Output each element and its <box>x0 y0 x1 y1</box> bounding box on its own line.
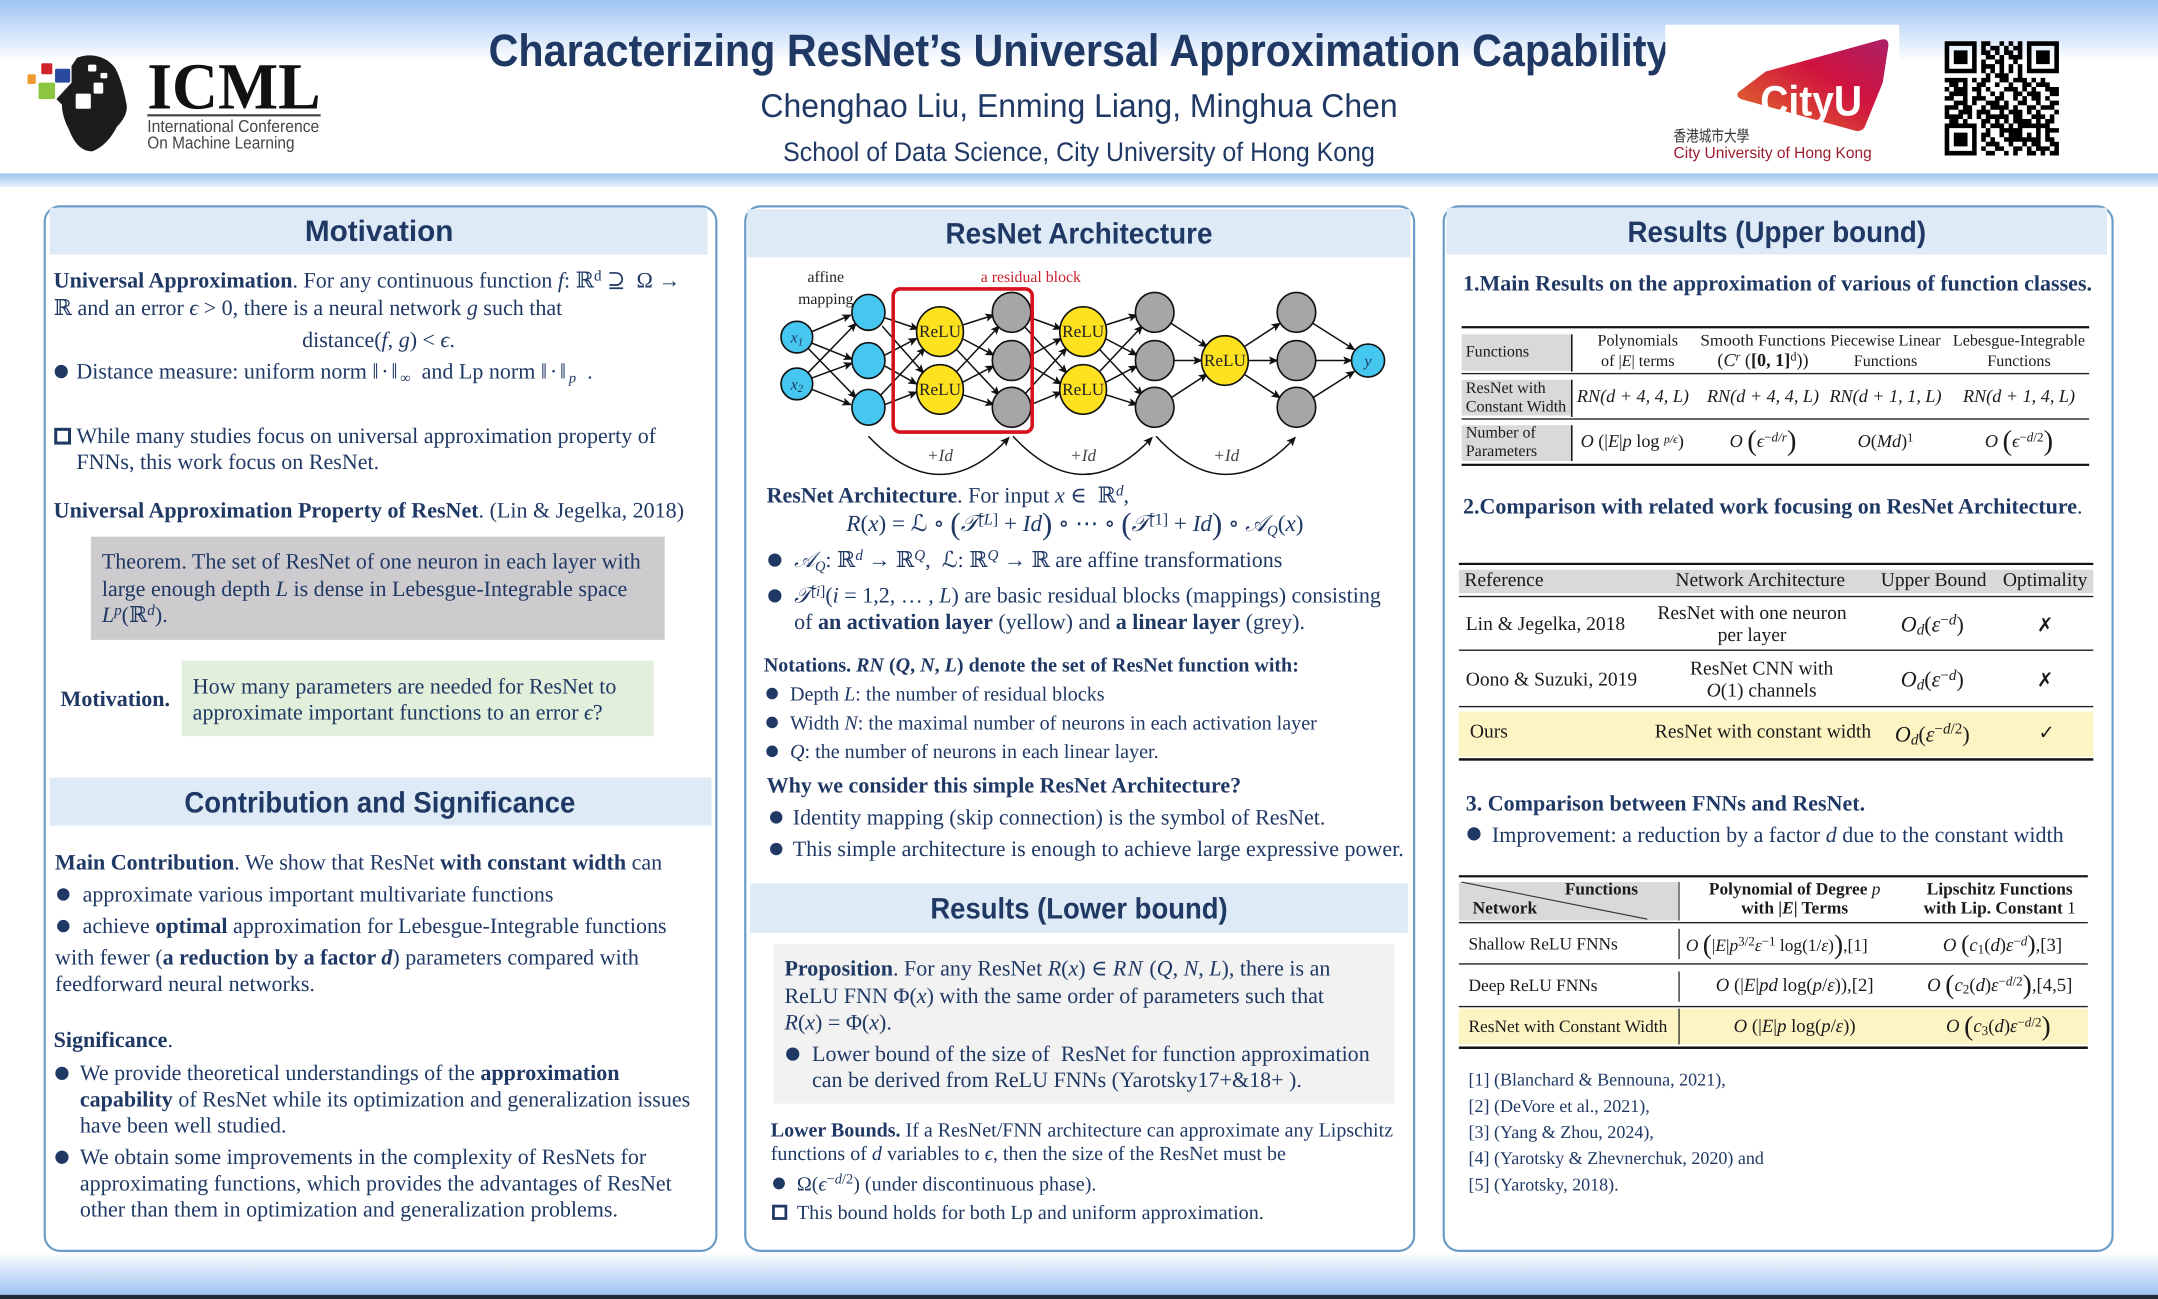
table: FNNs vs ResNet: E|p <box>1715 936 1738 955</box>
diagram: ResNet network: ReLU <box>919 380 961 399</box>
table: FNNs vs ResNet: −d <box>2013 936 2027 949</box>
text: ResNet architecture definition: R(x) = ℒ ∘ <box>846 511 945 537</box>
callout: theorem: Theorem. The set of ResNet of one neuron in each layer with <box>102 550 641 574</box>
table: related work: Ours <box>1470 721 1508 743</box>
callout: motivation question: How many parameters are needed for ResNet to <box>193 676 616 699</box>
table: related work: ) <box>1962 724 1970 747</box>
table: main results: ) <box>1678 431 1684 451</box>
text: lower bounds: −d/2 <box>827 1172 853 1188</box>
table: main results: O <box>1730 431 1747 451</box>
text: lower bounds: ) (under discontinuous phase). <box>853 1174 1096 1196</box>
table: main results: Functions <box>1854 352 1918 370</box>
callout: theorem: ). <box>155 604 168 627</box>
text: ResNet architecture definition: ( <box>825 585 833 608</box>
text: motivation label: Motivation. <box>61 688 170 711</box>
table: FNNs vs ResNet: ResNet with Constant Width <box>1468 1017 1668 1036</box>
table: main results: −d/2 <box>2019 432 2044 446</box>
table: FNNs vs ResNet: ) <box>1834 930 1843 960</box>
callout: theorem: p <box>113 603 122 619</box>
authors: Chenghao Liu, Enming Liang, Minghua Chen <box>760 88 1398 125</box>
table: FNNs vs ResNet: Polynomial of Degree p <box>1709 879 1880 899</box>
text: ResNet architecture definition: Id <box>1021 511 1043 537</box>
text: ResNet architecture definition: → ℝ are affine transformations <box>998 549 1282 572</box>
table: related work: ( <box>1924 669 1932 692</box>
table: FNNs vs ResNet: O <box>1946 1016 1964 1036</box>
table: FNNs vs ResNet: O <box>1686 936 1703 955</box>
text: significance: have been well studied. <box>80 1115 287 1138</box>
diagram: ResNet network: affine <box>807 270 844 286</box>
diagram: ResNet network: y <box>1363 354 1373 370</box>
table: main results: )) <box>1797 350 1809 370</box>
table: main results: ) <box>1787 424 1796 457</box>
table: related work <box>1459 563 2093 761</box>
text: universal approximation: and Lp norm <box>411 361 541 384</box>
table: main results: −d/r <box>1764 432 1787 446</box>
text: ResNet architecture definition: Q <box>815 560 826 575</box>
subheading: main results: 1.Main Results on the approximation of various of function classes. <box>1463 272 2092 296</box>
table: FNNs vs ResNet: with |E| Terms <box>1741 899 1848 918</box>
heading: Results (Upper bound) <box>1446 208 2107 255</box>
text: notations: Depth L: the number of residual blocks <box>790 684 1105 706</box>
table: related work: per layer <box>1718 625 1787 647</box>
logo: CityU <box>1665 25 1899 176</box>
text: references <box>1468 1069 1765 1194</box>
subheading: comparison with related work: 2.Comparison with related work focusing on ResNet Architecture. <box>1463 495 2083 519</box>
table: related work: ) <box>1956 614 1964 637</box>
text: significance: Significance. <box>54 1029 173 1053</box>
table: related work: Network Architecture <box>1675 570 1845 592</box>
heading: ResNet Architecture <box>747 209 1411 257</box>
table: FNNs vs ResNet: c <box>1969 934 1978 955</box>
logo: CityU: CityU <box>1760 77 1862 125</box>
text: references: [4] (Yarotsky & Zhevnerchuk, 2020) and <box>1468 1148 1765 1168</box>
table: related work: O(1) channels <box>1707 680 1817 702</box>
table: related work: ResNet CNN with <box>1690 658 1833 680</box>
table: FNNs vs ResNet: O <box>1927 974 1945 995</box>
table: main results: ( <box>1740 350 1751 370</box>
table: FNNs vs ResNet: ) <box>2023 970 2032 1000</box>
table: main results: r <box>1736 350 1741 363</box>
table: FNNs vs ResNet: ( <box>1969 974 1976 995</box>
table: related work: O <box>1901 614 1917 637</box>
text: ResNet architecture definition: [L] <box>978 509 998 528</box>
text: ResNet architecture definition: Q <box>1267 523 1278 539</box>
diagram: ResNet network: mapping <box>798 292 854 308</box>
text: main contribution: Main Contribution. We show that ResNet with constant width can <box>55 852 662 875</box>
text: universal approximation: distance(f, g) < ϵ. <box>302 329 455 352</box>
text: ResNet architecture definition: , <box>1124 484 1129 508</box>
table: related work: ✗ <box>2037 615 2053 637</box>
table: related work: Oono & Suzuki, 2019 <box>1466 669 1637 691</box>
table: FNNs vs ResNet: Lipschitz Functions <box>1927 879 2073 899</box>
text: focus on ResNet: While many studies focus on universal approximation property of <box>76 425 657 449</box>
text: significance <box>54 1029 690 1222</box>
text: why this architecture: Identity mapping (skip connection) is the symbol of ResNet. <box>793 806 1325 830</box>
table: main results: ResNet with <box>1466 379 1546 397</box>
text: main contribution: feedforward neural networks. <box>55 973 315 996</box>
table: main results: Piecewise Linear <box>1830 332 1941 350</box>
top gradient band <box>0 0 2158 62</box>
table: FNNs vs ResNet: ε <box>1755 936 1762 955</box>
table: main results: (C <box>1717 350 1736 370</box>
table: main results: Number of <box>1466 424 1536 442</box>
text: ResNet architecture definition: [1] <box>1149 509 1168 528</box>
callout: theorem: (ℝ <box>122 604 148 627</box>
text: ResNet architecture definition: ( <box>1278 511 1286 537</box>
table: main results: Functions <box>1987 352 2051 370</box>
text: notations <box>764 655 1317 764</box>
diagram: ResNet network: +Id <box>1213 446 1240 465</box>
text: universal approximation: . <box>576 361 593 384</box>
heading: Motivation <box>50 208 707 255</box>
logo: CityU: City University of Hong Kong <box>1674 146 1872 162</box>
table: FNNs vs ResNet: 3/2 <box>1738 936 1755 949</box>
table: related work: −d <box>1940 612 1956 629</box>
logo: ICML: International Conference <box>147 117 319 136</box>
callout: theorem: d <box>147 603 156 619</box>
text: lower bounds: This bound holds for both Lp and uniform approximation. <box>797 1203 1264 1225</box>
table: main results: O <box>1985 431 2002 451</box>
text: ResNet architecture definition: 𝒜 <box>794 549 822 572</box>
text: ResNet architecture definition: ( <box>950 506 961 541</box>
table: main results: RN(d + 4, 4, L) <box>1576 385 1689 406</box>
diagram: ResNet network: ReLU <box>919 322 961 341</box>
table: main results: ϵ <box>2012 431 2020 451</box>
table: related work: ε <box>1932 614 1941 637</box>
text: ResNet architecture definition: d <box>1116 483 1124 500</box>
callout: proposition: Proposition. For any ResNet R(x) ∈ RN (Q, N, L), there is an <box>784 958 1330 981</box>
text: universal approximation: ∞ <box>400 372 411 387</box>
text: references: [3] (Yang & Zhou, 2024), <box>1468 1121 1654 1142</box>
text: universal approximation: d <box>594 268 602 285</box>
subheading: FNNs vs ResNet <box>1466 793 2064 848</box>
table: related work: ε <box>1932 669 1941 692</box>
title: Characterizing ResNet’s Universal Approximation Capability <box>489 25 1670 76</box>
panel: left column <box>45 206 716 1251</box>
callout: proposition: R(x) = Φ(x). <box>783 1011 892 1035</box>
table: main results: RN(d + 1, 1, L) <box>1828 385 1942 406</box>
text: ResNet architecture definition: ∘ ⋯ ∘ <box>1052 511 1121 537</box>
header divider band <box>0 173 2158 187</box>
text: ResNet architecture definition: ) <box>1212 506 1222 541</box>
text: universal approximation property: Universal Approximation Property of ResNet. (Lin & Jegelka, 2018) <box>54 500 684 523</box>
heading: Results (Lower bound): Results (Lower bound) <box>930 892 1228 925</box>
table: main results: ( <box>1747 424 1757 457</box>
table: main results: Lebesgue-Integrable <box>1953 332 2085 350</box>
table: related work: ResNet with constant width <box>1655 721 1871 743</box>
text: universal approximation: Distance measure: uniform norm ‖·‖ <box>76 361 400 384</box>
footer: watermark text: www.PosterPresentations.com <box>77 1273 161 1280</box>
text: ResNet architecture definition: , <box>925 549 942 572</box>
diagram: ResNet network: x <box>791 377 798 394</box>
table: FNNs vs ResNet: ε) <box>1821 936 1834 955</box>
table: main results: Polynomials <box>1598 332 1679 350</box>
logo: CityU: 香港城市大學 <box>1674 128 1749 146</box>
table: main results: Constant Width <box>1466 398 1566 416</box>
table: main results: ( <box>2002 424 2012 457</box>
table: main results: RN(d + 1, 4, L) <box>1962 385 2075 406</box>
text: ResNet architecture definition: ( <box>1121 506 1132 541</box>
text: why this architecture: This simple architecture is enough to achieve large expressive power. <box>793 838 1404 861</box>
table: main results: Functions <box>1466 343 1530 361</box>
table: FNNs vs ResNet: O <box>1943 934 1961 955</box>
diagram: ResNet network: ReLU <box>1204 351 1246 370</box>
callout: motivation question <box>182 661 654 736</box>
text: ResNet architecture definition <box>767 483 1381 634</box>
table: FNNs vs ResNet: ,[3] <box>2036 934 2062 955</box>
text: ResNet architecture definition: + <box>1168 511 1193 537</box>
table: main results: ) <box>2044 424 2053 457</box>
table: FNNs vs ResNet: O (|E|pd log(p/ε)),[2] <box>1716 974 1874 995</box>
diagram: ResNet network: a residual block <box>981 270 1081 286</box>
callout: theorem: L <box>100 604 114 627</box>
text: why this architecture: Why we consider this simple ResNet Architecture? <box>767 775 1241 798</box>
text: ResNet architecture definition: ∘ <box>1222 511 1245 537</box>
text: focus on ResNet: FNNs, this work focus on ResNet. <box>76 451 379 475</box>
subheading: FNNs vs ResNet: 3. Comparison between FNNs and ResNet. <box>1466 793 1865 816</box>
text: ResNet architecture definition: d <box>855 548 864 564</box>
diagram: ResNet network: +Id <box>1070 446 1097 465</box>
table: main results: p/ϵ <box>1663 432 1679 446</box>
table: main results: d <box>1790 350 1797 363</box>
table: main results: ϵ <box>1757 431 1765 451</box>
table: main results <box>1462 326 2089 466</box>
text: notations: Width N: the maximal number of neurons in each activation layer <box>790 713 1317 735</box>
table: related work: ( <box>1918 724 1926 747</box>
text: ResNet architecture definition: 𝒜 <box>1245 511 1274 537</box>
text: ResNet architecture definition: x) <box>1286 511 1303 537</box>
table: FNNs vs ResNet: −d/2 <box>2017 1017 2042 1031</box>
text: ResNet architecture definition: + <box>998 511 1023 537</box>
table: main results: O (|E|p log <box>1581 431 1659 451</box>
text: significance: approximating functions, which provides the advantages of ResNet <box>80 1172 673 1196</box>
text: notations: Notations. RN (Q, N, L) denote the set of ResNet function with: <box>764 655 1299 677</box>
table: FNNs vs ResNet: −d/2 <box>1999 976 2023 989</box>
table: FNNs vs ResNet: 1 <box>1978 944 1985 958</box>
callout: motivation question: approximate important functions to an error ϵ? <box>193 702 603 725</box>
table: FNNs vs ResNet: d)ε <box>1994 1016 2017 1036</box>
heading: Results (Lower bound) <box>750 883 1408 933</box>
heading: Contribution and Significance: Contribution and Significance <box>184 786 575 819</box>
text: main contribution: achieve optimal approximation for Lebesgue-Integrable functions <box>83 915 667 938</box>
text: ResNet architecture definition: ) <box>1042 506 1052 541</box>
text: references: [1] (Blanchard & Bennouna, 2021), <box>1468 1069 1726 1090</box>
text: main contribution: approximate various important multivariate functions <box>83 883 553 907</box>
table: FNNs vs ResNet: d)ε <box>1976 974 1999 995</box>
logo: ICML: On Machine Learning <box>147 133 295 153</box>
table: related work: ( <box>1924 614 1932 637</box>
text: significance: We obtain some improvements in the complexity of ResNets for <box>80 1146 647 1170</box>
diagram: ResNet network: ReLU <box>1062 380 1104 399</box>
table: FNNs vs ResNet <box>1459 875 2088 1049</box>
table: related work: −d/2 <box>1934 721 1962 738</box>
text: universal approximation: p <box>567 372 576 387</box>
table: related work: Reference <box>1464 570 1543 592</box>
table: related work: ✓ <box>2038 722 2055 744</box>
callout: proposition: can be derived from ReLU FNNs (Yarotsky17+&18+ ). <box>812 1069 1302 1093</box>
table: FNNs vs ResNet: 2 <box>1963 984 1970 998</box>
text: why this architecture <box>767 775 1404 861</box>
table: FNNs vs ResNet: ,[4,5] <box>2032 974 2072 995</box>
footer: dark strip <box>0 1295 2158 1299</box>
callout: proposition <box>773 944 1394 1104</box>
logo: ICML: ICML <box>147 51 321 124</box>
text: universal approximation: Universal Approximation. For any continuous function f: ℝ <box>54 270 594 293</box>
text: lower bounds: functions of d variables to ϵ, then the size of the ResNet must be <box>771 1144 1286 1166</box>
table: FNNs vs ResNet: O (|E|p log(p/ε)) <box>1734 1016 1856 1036</box>
diagram: ResNet network: 1 <box>798 336 803 348</box>
table: FNNs vs ResNet: Functions <box>1565 879 1638 899</box>
text: ResNet architecture definition: i = 1,2, … , L) are basic residual blocks (mappings) consisting <box>833 585 1381 608</box>
text: lower bounds: Ω(ϵ <box>797 1174 827 1196</box>
callout: theorem <box>91 537 665 640</box>
panel: right column <box>1444 206 2113 1251</box>
table: related work: Lin & Jegelka, 2018 <box>1466 614 1625 636</box>
text: main contribution <box>55 852 667 996</box>
table: related work: O <box>1901 669 1917 692</box>
heading: ResNet Architecture: ResNet Architecture <box>946 217 1213 250</box>
table: main results: Parameters <box>1466 442 1538 460</box>
callout: proposition: ReLU FNN Φ(x) with the same order of parameters such that <box>784 985 1325 1009</box>
table: main results: [0, 1] <box>1751 350 1790 370</box>
table: FNNs vs ResNet: ) <box>2027 930 2036 958</box>
table: FNNs vs ResNet: d)ε <box>1990 934 2013 955</box>
logo: ICML <box>28 51 321 153</box>
table: FNNs vs ResNet: ( <box>1703 930 1712 960</box>
table: main results: 1 <box>1907 431 1913 444</box>
subheading: FNNs vs ResNet: Improvement: a reduction by a factor d due to the constant width <box>1492 824 2064 848</box>
heading: Results (Upper bound): Results (Upper bound) <box>1627 216 1926 249</box>
table: related work: d <box>1917 622 1925 638</box>
text: ResNet architecture definition: ResNet Architecture. For input x ∈ ℝ <box>767 484 1116 508</box>
table: FNNs vs ResNet: 3 <box>1982 1025 1989 1039</box>
table: related work: Upper Bound <box>1881 570 1987 592</box>
QR code <box>1945 44 2059 153</box>
table: FNNs vs ResNet: Deep ReLU FNNs <box>1468 976 1598 995</box>
table: FNNs vs ResNet: ( <box>1964 1011 1974 1042</box>
text: ResNet architecture definition: 𝒯 <box>1132 511 1156 537</box>
text: lower bounds: Lower Bounds. If a ResNet/FNN architecture can approximate any Lipschitz <box>771 1120 1394 1142</box>
heading: Motivation: Motivation <box>305 215 453 248</box>
table: FNNs vs ResNet: ) <box>2042 1011 2051 1042</box>
table: related work: ε <box>1926 724 1935 747</box>
table: main results: RN(d + 4, 4, L) <box>1706 385 1819 406</box>
table: related work: ✗ <box>2037 670 2053 692</box>
text: ResNet architecture definition: Q <box>987 548 999 564</box>
callout: theorem: large enough depth L is dense in Lebesgue-Integrable space <box>102 578 627 601</box>
table: related work: ) <box>1956 669 1964 692</box>
text: ResNet architecture definition: Id <box>1191 511 1213 537</box>
text: focus on ResNet <box>56 425 657 475</box>
table: FNNs vs ResNet: Shallow ReLU FNNs <box>1468 934 1618 954</box>
table: main results: Smooth Functions <box>1700 332 1826 350</box>
text: references: [2] (DeVore et al., 2021), <box>1468 1095 1650 1116</box>
table: FNNs vs ResNet: with Lip. Constant 1 <box>1924 899 2076 918</box>
text: ResNet architecture definition: of an activation layer (yellow) and a linear layer (grey). <box>794 611 1305 634</box>
table: FNNs vs ResNet: c <box>1973 1016 1982 1036</box>
text: ResNet architecture definition: 𝒯 <box>794 585 818 608</box>
table: FNNs vs ResNet: c <box>1954 974 1963 995</box>
text: notations: Q: the number of neurons in each linear layer. <box>790 742 1159 764</box>
table: FNNs vs ResNet: ( <box>1988 1016 1995 1036</box>
diagram: ResNet network: ReLU <box>1062 322 1104 341</box>
table: FNNs vs ResNet: | <box>1712 936 1715 955</box>
diagram: ResNet network: x <box>791 330 798 347</box>
table: FNNs vs ResNet: ,[1] <box>1843 936 1868 955</box>
table: related work: ResNet with one neuron <box>1657 603 1847 625</box>
table: main results: of |E| terms <box>1601 352 1675 370</box>
table: FNNs vs ResNet: log(1/ <box>1776 936 1822 955</box>
panel: middle column <box>745 206 1414 1251</box>
footer gradient band <box>0 1252 2158 1295</box>
text: significance: We provide theoretical understandings of the approximation <box>80 1062 620 1086</box>
table: related work: d <box>1917 677 1925 694</box>
text: universal approximation: ⊇ Ω → <box>602 270 680 293</box>
text: references: [5] (Yarotsky, 2018). <box>1468 1174 1619 1194</box>
text: universal approximation: ‖·‖ <box>541 361 569 384</box>
callout: proposition: Lower bound of the size of ResNet for function approximation <box>812 1043 1370 1066</box>
table: related work: Optimality <box>2003 570 2089 592</box>
text: ResNet architecture definition: ℒ: ℝ <box>942 549 987 572</box>
text: ResNet architecture definition: [i] <box>811 583 825 600</box>
text: significance: other than them in optimization and generalization problems. <box>80 1199 618 1222</box>
diagram: ResNet network: +Id <box>927 446 954 465</box>
table: related work: d <box>1911 732 1919 749</box>
affiliation: School of Data Science, City University of Hong Kong <box>783 138 1375 168</box>
table: related work: O <box>1895 724 1911 747</box>
table: FNNs vs ResNet: Network <box>1473 899 1537 918</box>
table: related work: −d <box>1940 667 1956 684</box>
table: FNNs vs ResNet: ( <box>1945 970 1955 1000</box>
heading: Contribution and Significance <box>50 777 712 826</box>
table: FNNs vs ResNet: ( <box>1961 930 1969 958</box>
table: main results: O(Md) <box>1858 431 1907 451</box>
text: ResNet architecture definition: : ℝ <box>825 549 856 572</box>
table: FNNs vs ResNet: −1 <box>1762 936 1776 949</box>
text: ResNet architecture definition: → ℝ <box>863 549 915 572</box>
diagram: ResNet network: 2 <box>798 383 803 395</box>
text: universal approximation <box>54 268 680 387</box>
text: lower bounds <box>771 1120 1394 1225</box>
text: significance: capability of ResNet while its optimization and generalization issues <box>80 1088 690 1112</box>
text: ResNet architecture definition: 𝒯 <box>961 511 985 537</box>
text: ResNet architecture definition: Q <box>914 548 925 564</box>
text: main contribution: with fewer (a reduction by a factor d) parameters compared with <box>55 947 639 970</box>
table: FNNs vs ResNet: ( <box>1984 934 1991 955</box>
text: universal approximation: ℝ and an error ϵ > 0, there is a neural network g such that <box>54 297 563 321</box>
diagram: ResNet network <box>781 270 1385 474</box>
